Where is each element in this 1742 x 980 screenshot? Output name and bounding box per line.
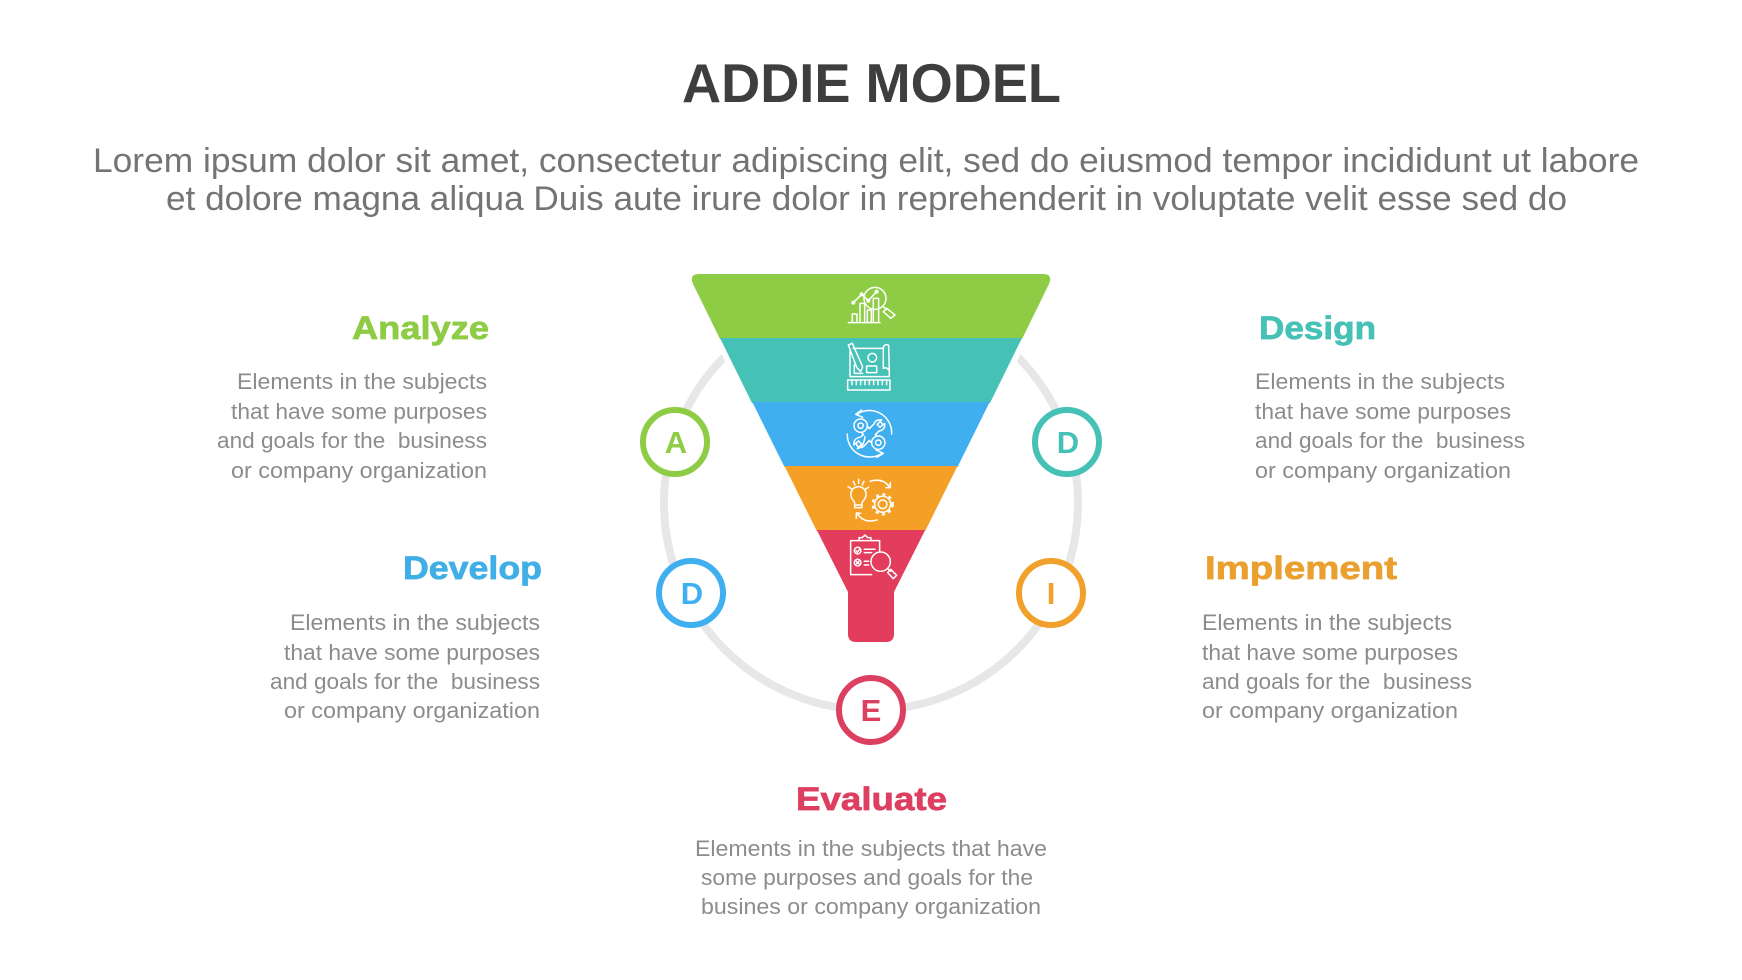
text block: design: Elements in the subjects [1255,369,1505,394]
badge: A: A [665,425,687,460]
text block: design: and goals for the business [1255,428,1525,453]
text block: develop: Elements in the subjects [290,610,540,635]
text block: analyze: that have some purposes [231,399,487,424]
panel: implement [1202,550,1472,723]
panel: evaluate [695,781,1047,919]
funnel band: evaluate with neck [817,530,925,642]
icon: clipboard and magnifier [851,535,897,579]
text block: develop: or company organization [284,698,540,723]
funnel band: design [720,338,1022,403]
text block: evaluate [695,836,1047,919]
text block: implement: Elements in the subjects [1202,610,1452,635]
text block: implement: and goals for the business [1202,669,1472,694]
text block: evaluate: some purposes and goals for the [701,865,1033,890]
badge: I: I [1047,576,1055,611]
text block: design: or company organization [1255,458,1511,483]
funnel diagram [692,274,1050,642]
heading: evaluate: Evaluate [796,781,947,817]
badge: I [1019,561,1083,625]
text block: design [1255,369,1525,483]
title: ADDIE MODEL [682,52,1061,114]
heading: design: Design [1259,310,1376,346]
funnel band: develop [752,402,990,467]
text block: analyze: Elements in the subjects [237,369,487,394]
panel: develop [270,550,542,723]
funnel band: analyze [692,274,1050,339]
badge: D left: D [681,576,703,611]
wrench jaws [854,420,885,449]
text block: evaluate: busines or company organization [701,894,1041,919]
icon: crossed wrenches in cycle arrows [847,410,892,457]
text block: analyze: or company organization [231,458,487,483]
text block: evaluate: Elements in the subjects that have [695,836,1047,861]
text block: implement: that have some purposes [1202,640,1458,665]
badge: E [839,678,903,742]
funnel band: implement [784,466,958,531]
badge: D right: D [1057,425,1079,460]
text block: design: that have some purposes [1255,399,1511,424]
text block: analyze: and goals for the business [217,428,487,453]
heading: implement: Implement [1205,550,1397,586]
panel: analyze [217,310,489,483]
subtitle text block: Lorem ipsum dolor sit amet, consectetur adipiscing elit, sed do eiusmod tempor incididunt ut labore [93,142,1639,180]
heading: develop: Develop [403,550,542,586]
subtitle text block: et dolore magna aliqua Duis aute irure dolor in reprehenderit in voluptate velit esse sed do [166,180,1567,218]
badge: D right [1035,410,1099,474]
text block: develop: that have some purposes [284,640,540,665]
text block: implement [1202,610,1472,723]
text block: implement: or company organization [1202,698,1458,723]
heading: analyze: Analyze [352,310,489,346]
ring connecting the letter badges [664,296,1078,710]
text block: analyze [217,369,487,483]
badge: A [643,410,707,474]
funnel white halo [692,274,1050,642]
badge: E: E [861,693,881,728]
icon: light bulb and gear cycle [848,479,893,521]
badge: D left [659,561,723,625]
text block: develop: and goals for the business [270,669,540,694]
subtitle text block [93,142,1639,218]
icon: chart and magnifier [848,287,895,323]
panel: design [1255,310,1525,483]
icon: blueprint and ruler [848,343,890,390]
text block: develop [270,610,540,723]
